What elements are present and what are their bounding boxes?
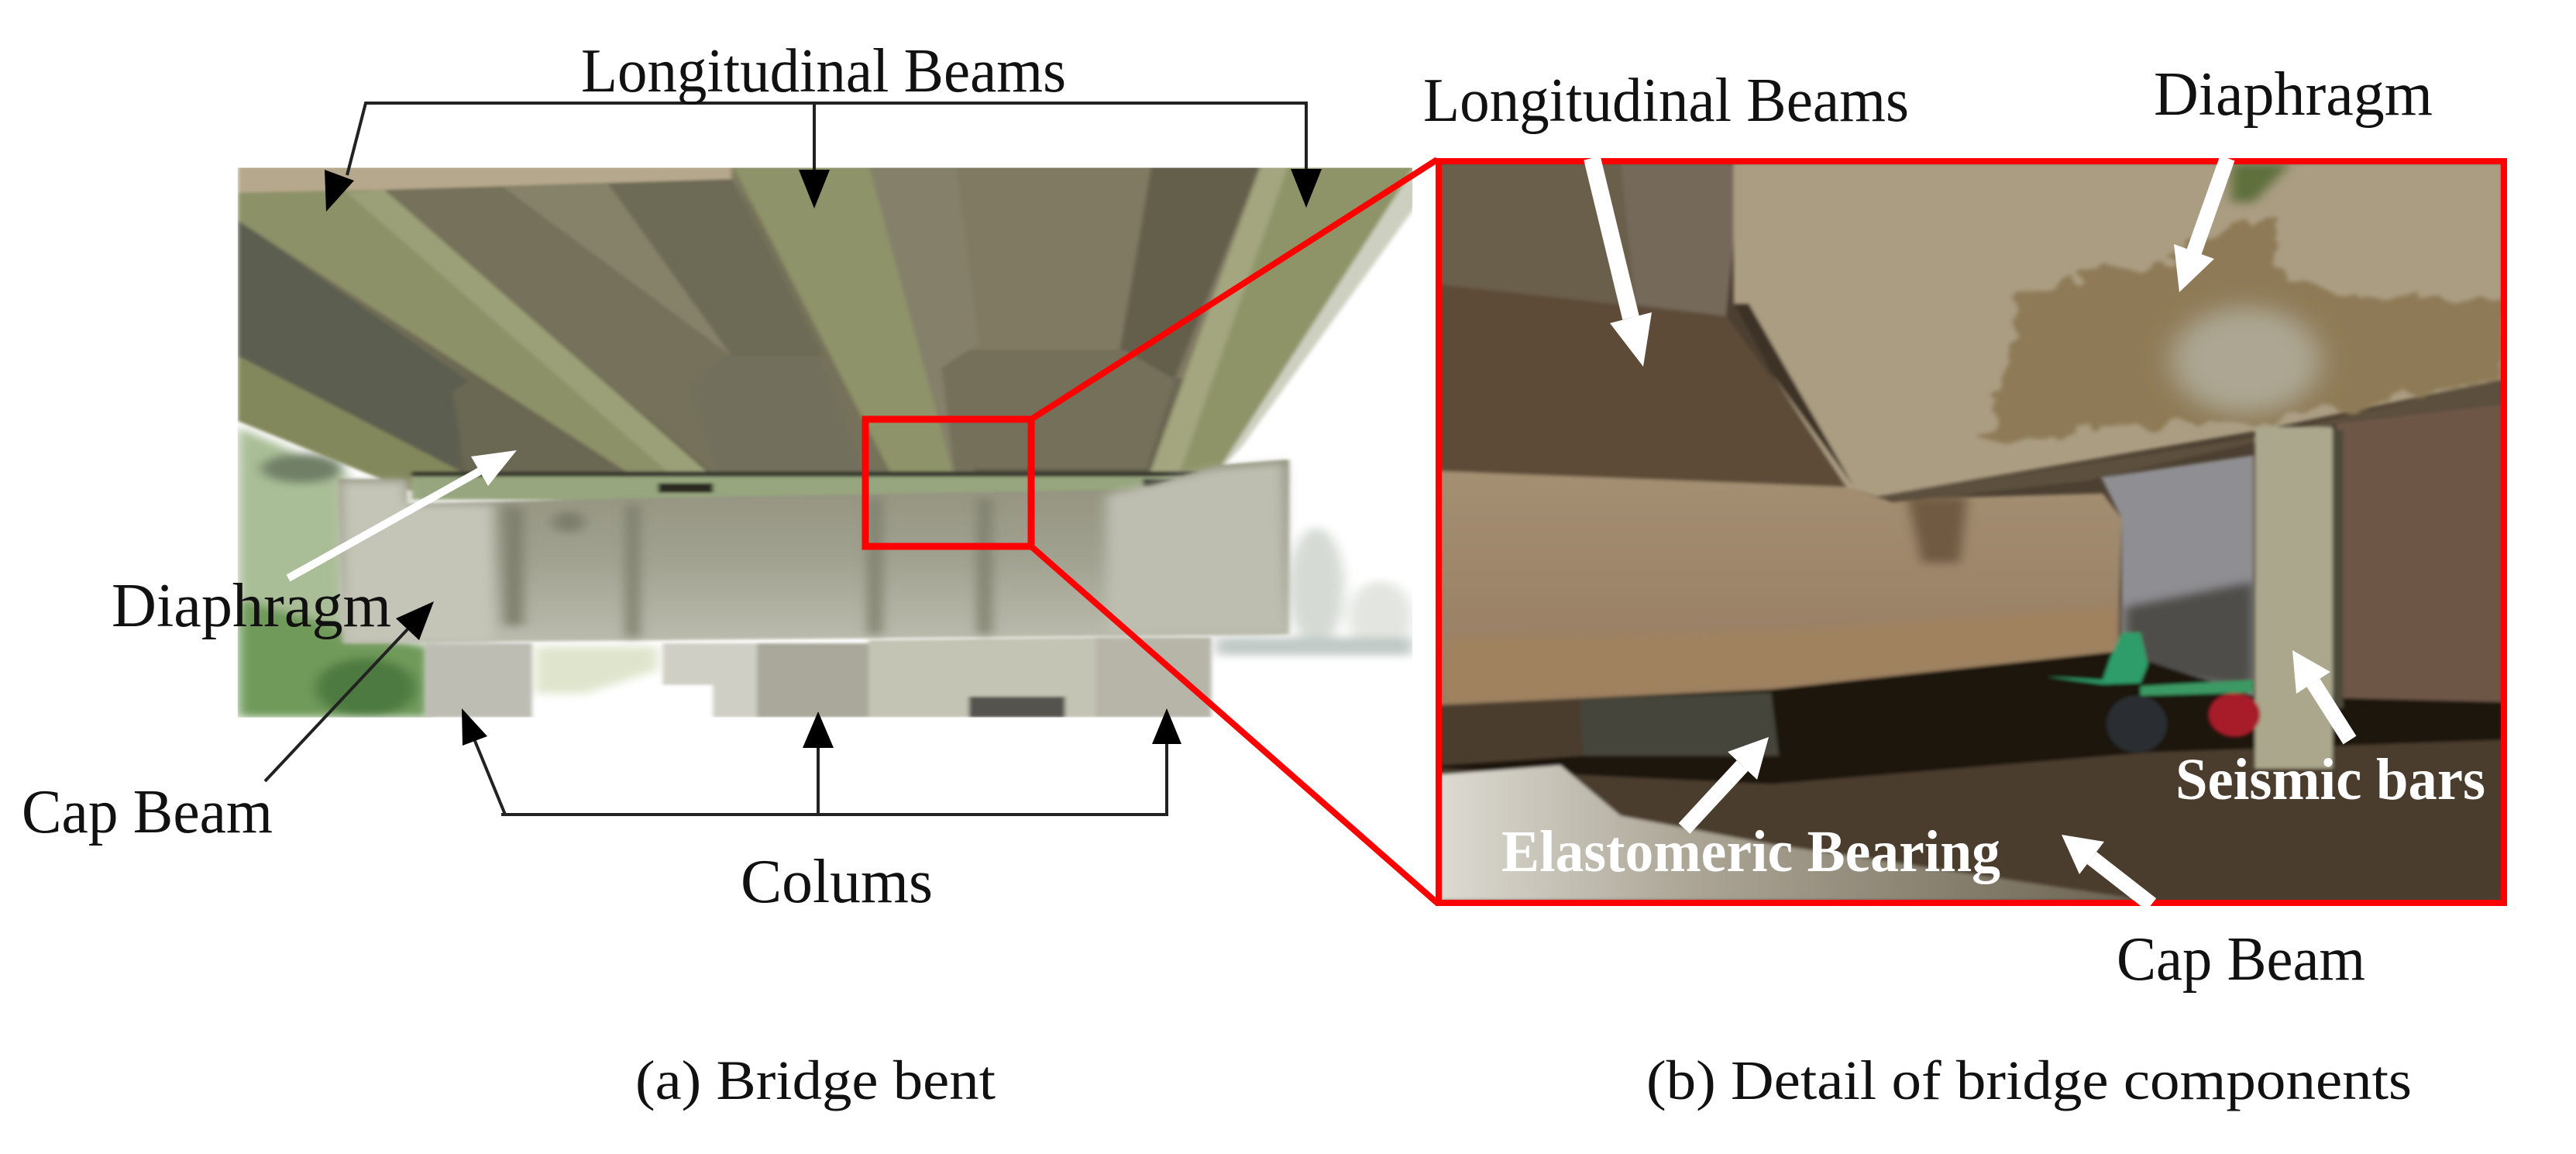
- zoom connector lines: [1031, 160, 1437, 903]
- label: diaphragm right: Diaphragm: [2154, 60, 2433, 129]
- label: seismic bars: Seismic bars: [2175, 747, 2485, 812]
- label: cap beam left: Cap Beam: [22, 778, 273, 846]
- highlight box on bridge bent: [865, 419, 1031, 546]
- photo: detail of bridge components: [1437, 160, 2504, 903]
- arrow: cap beam: [265, 601, 434, 781]
- label: cap beam right: Cap Beam: [2117, 925, 2365, 994]
- detail panel frame: [1439, 161, 2504, 903]
- white arrow: diaphragm detail: [2174, 158, 2227, 292]
- arrows: columns: [462, 708, 1181, 815]
- photo: bridge bent: [238, 163, 1417, 718]
- white arrow: diaphragm left: [288, 450, 517, 578]
- label: diaphragm left: Diaphragm: [112, 572, 391, 640]
- white arrow: longitudinal beams detail: [1592, 158, 1652, 367]
- label: elastomeric bearing: Elastomeric Bearing: [1501, 819, 2000, 884]
- white arrow: seismic bars: [2292, 650, 2350, 740]
- white arrow: cap beam detail: [2062, 835, 2151, 904]
- white arrow: elastomeric bearing: [1684, 737, 1769, 828]
- label: longitudinal beams right: Longitudinal Beams: [1423, 67, 1909, 135]
- arrows: longitudinal beams: [325, 103, 1322, 212]
- label: longitudinal beams left: Longitudinal Beams: [581, 37, 1066, 105]
- label: columns: Colums: [741, 848, 933, 916]
- caption b: (b) Detail of bridge components: [1646, 1049, 2412, 1111]
- caption a: (a) Bridge bent: [635, 1049, 996, 1111]
